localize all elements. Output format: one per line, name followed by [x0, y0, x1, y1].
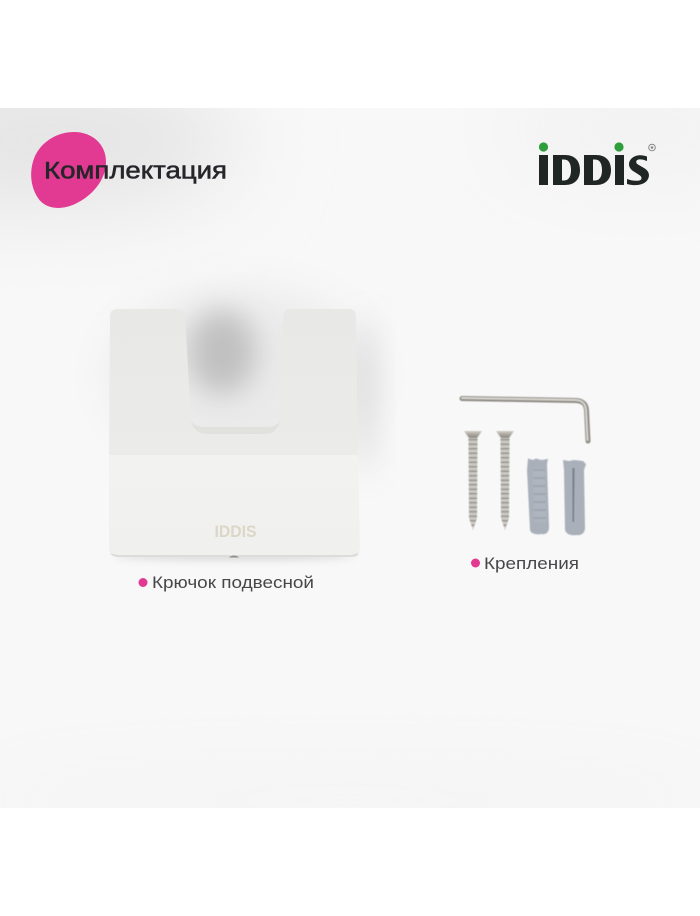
icon: pink blob	[31, 132, 106, 208]
screw 2	[496, 431, 514, 530]
label: hook: Крючок подвесной	[152, 574, 314, 592]
product: fasteners	[462, 398, 588, 535]
hook shadow	[110, 290, 370, 460]
infographic canvas	[0, 108, 700, 808]
heading: Комплектация	[31, 132, 227, 208]
wall plug 2	[563, 460, 586, 535]
hook lower body	[109, 455, 360, 556]
wall plug 1	[527, 458, 549, 534]
hook upper body	[109, 309, 358, 455]
hook screw hole	[229, 556, 239, 558]
hook notch inner edge	[191, 420, 280, 434]
heading: Комплектация: Комплектация	[44, 158, 227, 184]
logo: IDDIS	[539, 142, 655, 185]
hex key	[462, 398, 588, 441]
hook engraved logo: IDDIS	[214, 522, 256, 541]
screw 1	[464, 431, 482, 530]
label: fasteners: Крепления	[484, 555, 579, 573]
product: wall hook	[109, 290, 376, 560]
